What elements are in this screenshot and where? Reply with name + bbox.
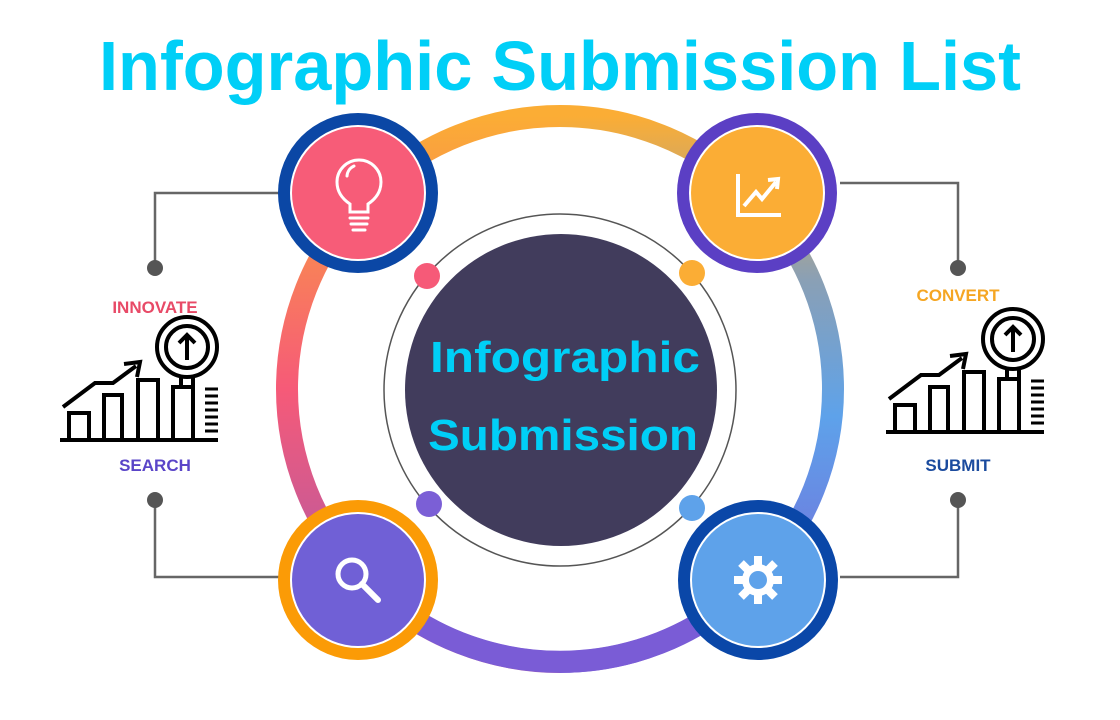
icon: left growth chart [60,317,218,440]
label: submit: SUBMIT [925,456,991,475]
label: search: SEARCH [119,456,191,475]
circle: convert chart [677,113,837,273]
circle: search magnifier [278,500,438,660]
label: innovate: INNOVATE [112,298,198,317]
small dots [414,260,705,521]
center circle [405,234,717,546]
label: convert: CONVERT [916,286,1000,305]
center circle: Submission [428,411,698,460]
thin outline circle [384,214,736,566]
outer ring [287,116,833,662]
connector lines [147,183,966,577]
title: Infographic Submission List [99,27,1021,105]
center circle: Infographic [430,333,700,382]
circle: innovate bulb [278,113,438,273]
circle: submit gear [678,500,838,660]
icon: right growth chart [886,309,1044,432]
